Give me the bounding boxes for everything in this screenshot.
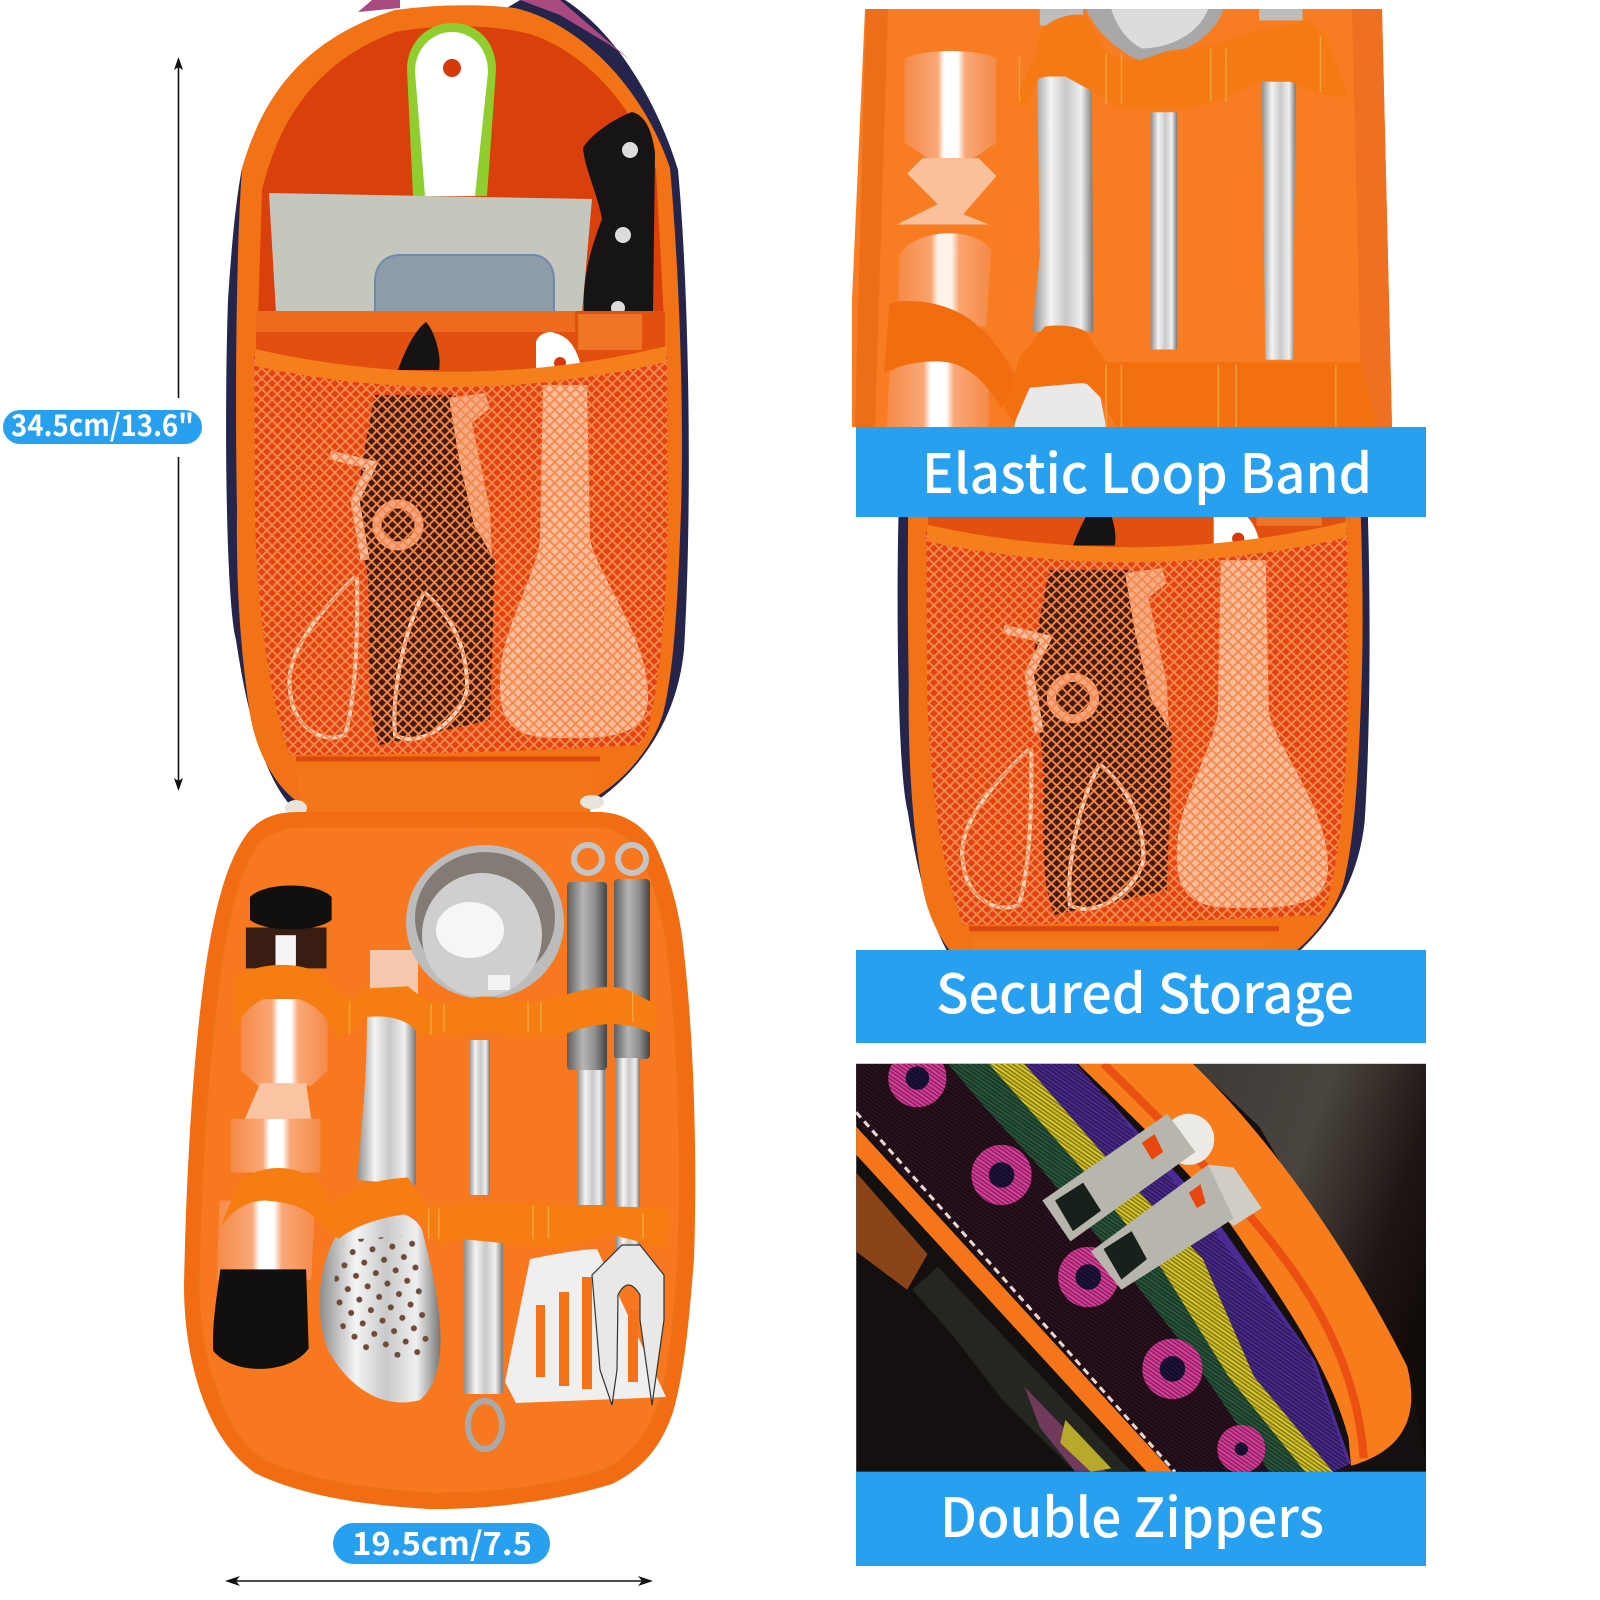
label: double zippers: Double Zippers <box>940 1474 1324 1553</box>
jar upper glass <box>246 928 327 968</box>
white stitching <box>856 1112 1175 1472</box>
width label: 19.5cm/7.5 <box>352 1519 532 1565</box>
top handle and woven trim <box>358 0 630 60</box>
orange lower zipper strip <box>856 1127 1172 1472</box>
height label: 34.5cm/13.6" <box>11 401 194 445</box>
orange main zipper <box>1078 1064 1411 1466</box>
purple stripe <box>1024 1064 1351 1472</box>
upper bag compartment with mesh pocket <box>226 0 689 816</box>
rear pocket strip <box>256 311 665 372</box>
strap stitching <box>1019 36 1336 427</box>
bottom jar <box>887 361 989 427</box>
orange zipper rim <box>236 5 682 800</box>
detail panel: elastic loop band photo <box>852 9 1392 427</box>
jar neck <box>245 1083 311 1119</box>
woven fabric base <box>856 1064 1351 1472</box>
width dimension arrow <box>225 1576 653 1586</box>
upper elastic strap <box>232 965 656 1037</box>
scissors loops <box>289 577 467 739</box>
jar bottom lid <box>213 1269 309 1369</box>
red back lining <box>258 26 664 320</box>
knife handle <box>583 112 655 315</box>
ring <box>377 504 419 546</box>
first zipper pull <box>1042 1114 1214 1241</box>
rod base <box>1152 408 1183 427</box>
hinge clips <box>285 795 604 816</box>
detail panel: secured storage photo <box>898 517 1370 950</box>
orange lining background <box>852 9 1392 427</box>
pink woven rings <box>897 1058 1257 1464</box>
stitched left edge <box>855 9 888 427</box>
lower elastic strap <box>219 1168 668 1249</box>
jar middle glass <box>241 999 328 1086</box>
jar top lid <box>250 885 332 929</box>
lower-left blurred fabric <box>856 1172 928 1290</box>
hinge strip <box>297 768 592 815</box>
perforated spoon <box>1014 381 1106 427</box>
ladle <box>406 845 564 1449</box>
grey surface upper right <box>1193 1064 1426 1302</box>
fork head <box>592 1245 664 1405</box>
bag outer fabric edge <box>226 0 689 805</box>
second zipper pull <box>1091 1165 1262 1290</box>
yellow stripe <box>989 1064 1333 1472</box>
rice paddle <box>500 385 648 738</box>
tong handle <box>1032 76 1093 332</box>
stitched right edge <box>1352 9 1392 427</box>
inner lining <box>198 826 680 1494</box>
pocket elastic band <box>255 346 667 387</box>
middle jar <box>897 233 991 327</box>
spice jar <box>213 885 332 1369</box>
jar lower glass <box>231 1119 320 1172</box>
fork handle with ring <box>614 845 650 1253</box>
lower strap <box>1004 326 1377 427</box>
label: double zippers <box>856 1472 1426 1566</box>
ladle bowl <box>1086 9 1223 60</box>
zipper teeth line <box>1104 1064 1364 1458</box>
black tip <box>398 322 440 370</box>
detail panel: double zippers photo <box>856 1058 1426 1472</box>
jar band <box>884 301 1019 408</box>
top jar <box>905 51 996 158</box>
top strap <box>1014 14 1348 110</box>
spatula handle with ring <box>567 845 607 1205</box>
white tab <box>536 332 582 370</box>
ladle rod <box>1151 112 1177 349</box>
lower bag compartment with utensils <box>184 812 695 1509</box>
dark backdrop <box>856 1064 1426 1472</box>
opener <box>449 393 492 556</box>
label: secured storage: Secured Storage <box>936 950 1354 1029</box>
skewer rod <box>1262 82 1296 360</box>
slotted spoon tongs <box>319 950 441 1403</box>
zoomed utensils <box>884 9 1377 427</box>
green and white spatula <box>407 23 496 196</box>
label: secured storage <box>856 950 1426 1043</box>
kitchen towel with sponge patch <box>269 193 592 313</box>
jar neck <box>897 158 996 224</box>
dark blades behind mesh <box>358 395 495 745</box>
label: elastic loop band: Elastic Loop Band <box>922 430 1372 509</box>
handle tops <box>1040 9 1303 26</box>
green stripe <box>948 1064 1310 1472</box>
weave texture <box>856 1064 1351 1472</box>
jar bottom glass <box>217 1201 315 1280</box>
mesh pocket <box>250 346 670 760</box>
slotted turner <box>505 1249 666 1403</box>
height dimension arrow <box>174 57 183 791</box>
lower bag shell <box>184 812 695 1509</box>
